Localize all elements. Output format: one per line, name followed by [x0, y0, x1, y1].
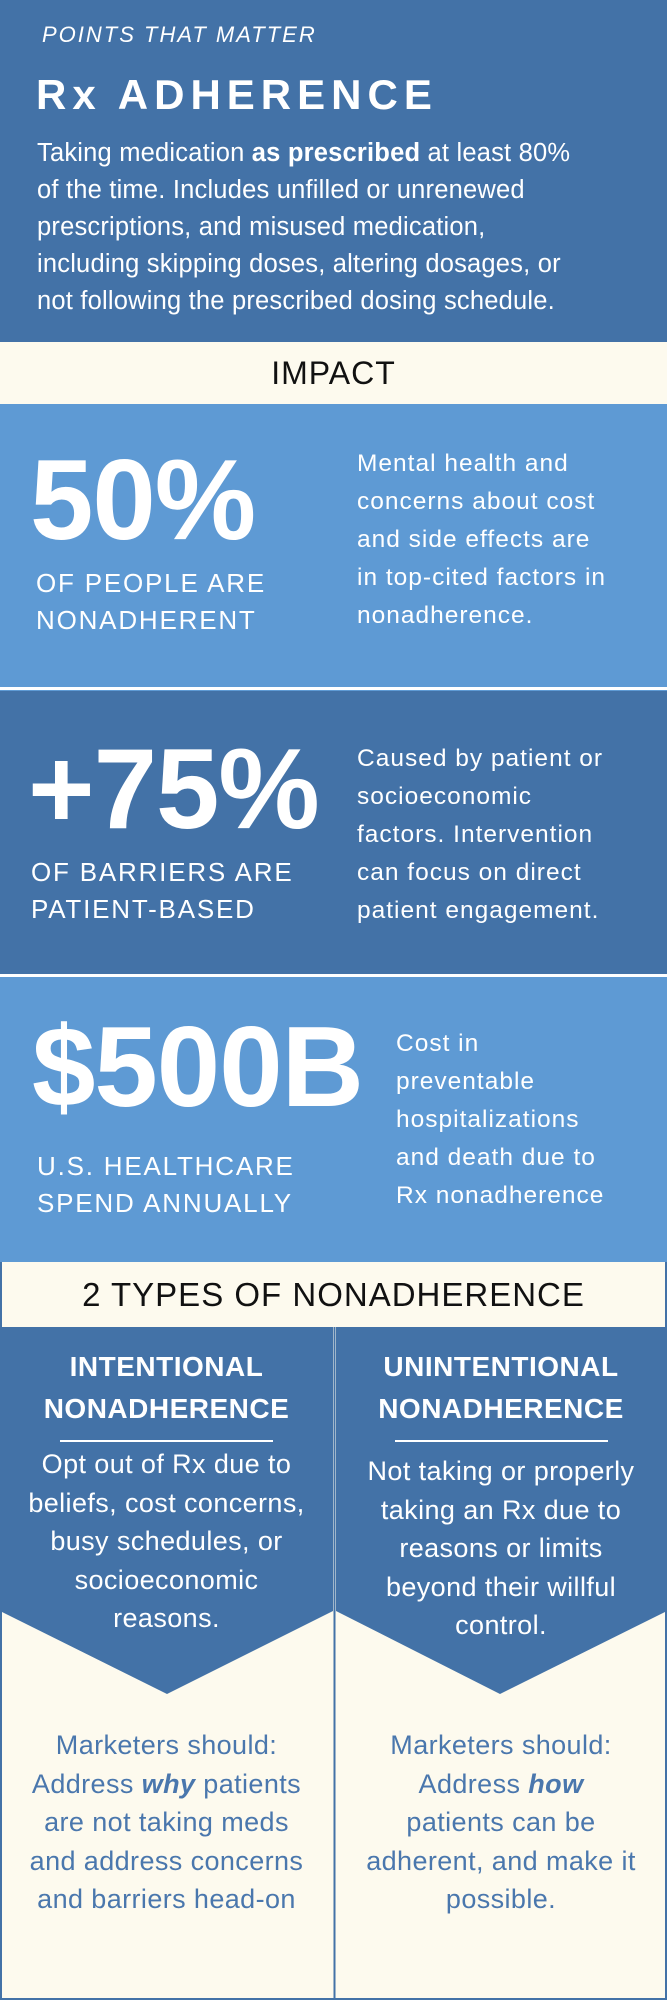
description [28, 1449, 305, 1633]
description: factors. Intervention [357, 821, 593, 848]
description: and side effects are [357, 526, 590, 553]
description: control. [455, 1610, 547, 1640]
description: nonadherence. [357, 602, 533, 629]
heading: UNINTENTIONAL [383, 1351, 619, 1382]
marketers left: Marketers should: [56, 1730, 277, 1760]
caption: OF PEOPLE ARE [36, 568, 266, 598]
marketers right: Marketers should: [390, 1730, 612, 1760]
caption: PATIENT-BASED [31, 894, 256, 924]
description: Not taking or properly [368, 1456, 634, 1486]
caption: SPEND ANNUALLY [37, 1188, 293, 1218]
description: Mental health and [357, 450, 569, 477]
kicker: POINTS THAT MATTER [42, 22, 317, 47]
column: intentional [28, 1351, 305, 1633]
description: reasons or limits [399, 1533, 603, 1563]
panel: 50% [0, 404, 667, 690]
definition text: of the time. Includes unfilled or unrenewed [37, 176, 525, 204]
stat 50%: 50% [30, 437, 255, 564]
panel: $500B [0, 977, 667, 1262]
heading [378, 1351, 624, 1424]
marketers right: possible. [446, 1884, 556, 1914]
marketers left: Address why patients [32, 1768, 301, 1798]
description: reasons. [113, 1603, 220, 1633]
stat 500B: $500B [32, 1004, 363, 1131]
description: concerns about cost [357, 488, 595, 515]
description: socioeconomic [357, 783, 532, 810]
marketers right: adherent, and make it [366, 1846, 636, 1876]
heading: NONADHERENCE [378, 1393, 624, 1424]
column: unintentional [368, 1351, 634, 1640]
marketers left: are not taking meds [44, 1807, 289, 1837]
description: taking an Rx due to [381, 1494, 621, 1524]
description: Rx nonadherence [396, 1182, 604, 1209]
marketers left: and address concerns [30, 1846, 303, 1876]
heading: INTENTIONAL [70, 1351, 263, 1382]
marketers right: patients can be [406, 1807, 596, 1837]
description: Opt out of Rx due to [42, 1449, 291, 1479]
definition text: prescriptions, and misused medication, [37, 213, 485, 241]
caption [36, 568, 266, 635]
marketers left [30, 1730, 303, 1914]
description: and death due to [396, 1144, 596, 1171]
description [357, 745, 603, 924]
description: socioeconomic [75, 1564, 258, 1594]
types heading: 2 TYPES OF NONADHERENCE [82, 1276, 585, 1313]
title: Rx ADHERENCE [36, 71, 438, 118]
impact heading: IMPACT [271, 355, 396, 391]
description: preventable [396, 1068, 535, 1095]
description [368, 1456, 634, 1640]
stat 75%: +75% [28, 726, 319, 853]
description: beliefs, cost concerns, [28, 1488, 305, 1518]
caption [31, 857, 294, 924]
definition text: including skipping doses, altering dosages, or [37, 250, 561, 278]
description: in top-cited factors in [357, 564, 606, 591]
description: busy schedules, or [50, 1526, 283, 1556]
description: beyond their willful [386, 1572, 616, 1602]
header panel [0, 0, 667, 342]
description [357, 450, 606, 629]
description [396, 1030, 604, 1209]
types heading [0, 1262, 667, 1327]
panel: +75% [0, 690, 667, 977]
marketers right: Address how [419, 1768, 583, 1798]
caption: OF BARRIERS ARE [31, 857, 294, 887]
marketers right [366, 1730, 636, 1914]
caption: U.S. HEALTHCARE [37, 1151, 295, 1181]
description: can focus on direct [357, 859, 582, 886]
heading [44, 1351, 289, 1424]
heading: NONADHERENCE [44, 1393, 289, 1424]
caption: NONADHERENT [36, 605, 257, 635]
caption [37, 1151, 295, 1218]
frame and chevrons [0, 1327, 667, 2000]
definition text: Taking medication as prescribed at least 80% [37, 139, 570, 167]
impact heading [0, 342, 667, 404]
description: Caused by patient or [357, 745, 603, 772]
marketers left: and barriers head-on [37, 1884, 296, 1914]
description: Cost in [396, 1030, 479, 1057]
description: hospitalizations [396, 1106, 580, 1133]
definition text [37, 139, 570, 315]
definition text: not following the prescribed dosing schedule. [37, 287, 555, 315]
description: patient engagement. [357, 897, 599, 924]
